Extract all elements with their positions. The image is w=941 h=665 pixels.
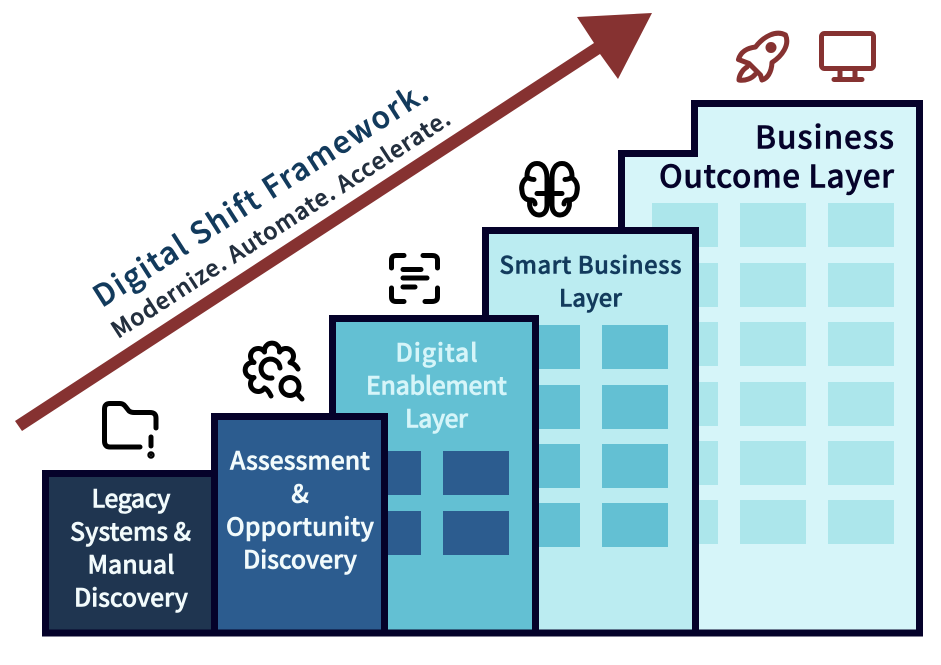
heading: Assessment and Opportunity Discovery: & — [291, 474, 309, 510]
heading: Smart Business Layer: Smart Business — [500, 246, 682, 280]
heading: Legacy Systems and Manual Discovery: Manual — [88, 546, 174, 582]
panel: Business Outcome Layer — [622, 104, 920, 633]
heading: Smart Business Layer: Layer — [559, 278, 622, 314]
heading: Business Outcome Layer: Outcome Layer — [659, 152, 894, 198]
heading: Legacy Systems and Manual Discovery — [70, 480, 191, 614]
heading: Digital Enablement Layer: Digital — [396, 334, 478, 370]
windows: enablement layer — [355, 451, 509, 555]
heading: Business Outcome Layer — [659, 112, 894, 198]
icon: rocket — [738, 33, 787, 80]
heading: Digital Enablement Layer — [366, 334, 507, 436]
title: Digital Shift Framework: Digital Shift Framework. — [83, 68, 435, 316]
heading: Assessment and Opportunity Discovery: Discovery — [243, 540, 358, 576]
heading: Assessment and Opportunity Discovery: Assessment — [230, 442, 370, 478]
heading: Digital Enablement Layer: Layer — [405, 400, 469, 436]
heading: Business Outcome Layer: Business — [755, 112, 894, 158]
heading: Digital Enablement Layer: Enablement — [366, 366, 507, 402]
panel: Digital Enablement Layer — [332, 318, 536, 633]
icon: document scan — [392, 256, 438, 302]
heading: Assessment and Opportunity Discovery — [226, 442, 374, 576]
arrow: growth trajectory — [15, 13, 652, 431]
heading: Smart Business Layer — [500, 246, 682, 314]
subtitle: Modernize. Automate. Accelerate.: Modernize. Automate. Accelerate. — [103, 100, 456, 345]
windows: outcome layer — [652, 203, 894, 544]
icon: gear with magnifier — [245, 343, 302, 399]
heading: Assessment and Opportunity Discovery: Opportunity — [226, 508, 374, 544]
heading: Legacy Systems and Manual Discovery: Systems & — [70, 512, 191, 548]
icon: folder with alert — [104, 404, 156, 456]
windows: smart layer — [514, 325, 668, 547]
icon: monitor — [822, 34, 874, 80]
panel: Smart Business Layer — [486, 230, 696, 633]
panel: Assessment and Opportunity Discovery — [214, 416, 384, 633]
heading: Legacy Systems and Manual Discovery: Discovery — [74, 578, 188, 614]
icon: brain — [522, 164, 577, 215]
panel: Legacy Systems and Manual Discovery — [46, 474, 214, 633]
heading: Legacy Systems and Manual Discovery: Legacy — [92, 480, 171, 516]
